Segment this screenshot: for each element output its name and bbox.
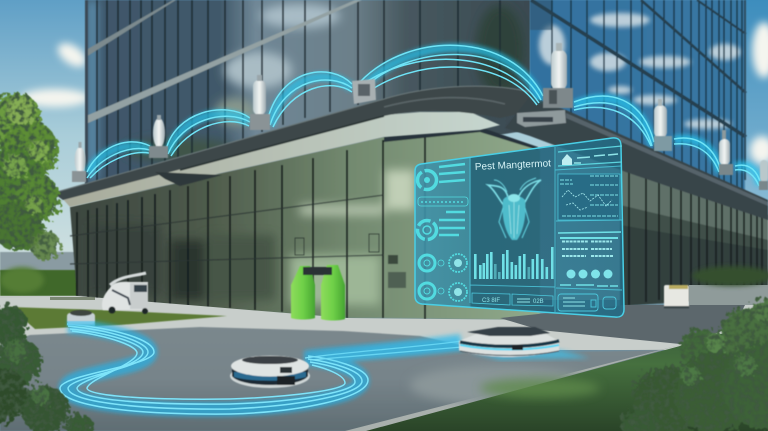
lawn: [366, 320, 768, 431]
bottom stat boxes: [472, 293, 553, 306]
canopy fascia left: [53, 86, 545, 200]
tank left: [291, 266, 315, 320]
delivery robot: [102, 273, 148, 314]
canister 6: [719, 130, 733, 175]
canister 3: [250, 75, 270, 130]
canister 4: [543, 43, 573, 108]
canister 7: [759, 160, 768, 190]
clouds: [21, 22, 768, 164]
left bars 1: [439, 164, 465, 182]
canopy underside: [62, 112, 500, 207]
grass strip: [10, 307, 227, 329]
light plaza: [0, 296, 768, 350]
canopy roof: [53, 86, 768, 220]
tank right: [321, 265, 345, 320]
service unit right: [664, 285, 689, 308]
small gauges: [419, 254, 467, 301]
data box: [558, 232, 621, 286]
floor bands: [86, 0, 176, 57]
left bars 2: [439, 212, 465, 235]
canopy fascia right: [505, 96, 768, 220]
robot platform right: [459, 327, 590, 360]
left gauge 2: [418, 220, 436, 240]
low wall and hedge right: [689, 266, 768, 305]
canopy beam: [155, 172, 222, 186]
insect hologram: [488, 178, 541, 240]
lower glass right wing: [620, 165, 768, 306]
canister 5: [654, 99, 672, 151]
rooftop mist arcs: [87, 45, 761, 186]
bush bottom left: [0, 305, 94, 431]
ground: [0, 296, 768, 431]
bottom stat boxes: 02B: [533, 299, 544, 305]
tree left: [0, 92, 60, 260]
dark paving: [0, 327, 665, 431]
upper facade right wing: [530, 0, 748, 190]
bottom right controls: [558, 294, 616, 311]
bar chart: [474, 247, 554, 279]
dotted strip: [418, 197, 468, 206]
bush bottom right: [622, 298, 768, 431]
air unit: [352, 79, 376, 104]
corner device: [517, 110, 566, 127]
panel title: Pest Mangtermot: [475, 158, 551, 173]
left gauge 1: [418, 170, 436, 190]
small robot far left: [67, 310, 95, 326]
floor spray trails: [60, 324, 465, 414]
robot vacuum centre: [230, 356, 310, 388]
green tanks: [291, 265, 345, 320]
holographic dashboard panel: [415, 138, 624, 317]
tank connector: [303, 267, 332, 275]
reflections in glass: [88, 0, 524, 180]
upper facade left wing: [85, 0, 530, 200]
map box: [558, 174, 620, 220]
sky background: [0, 0, 768, 300]
bottom stat boxes: C3 8IF: [482, 298, 500, 304]
canister 2: [149, 115, 168, 158]
far background fence and hedge: [0, 252, 110, 306]
canister 1: [72, 142, 86, 182]
lower glass storefront left: [70, 127, 540, 320]
spray canisters on canopy: [72, 43, 768, 190]
far paving: [500, 305, 745, 345]
top right header: [558, 146, 622, 166]
